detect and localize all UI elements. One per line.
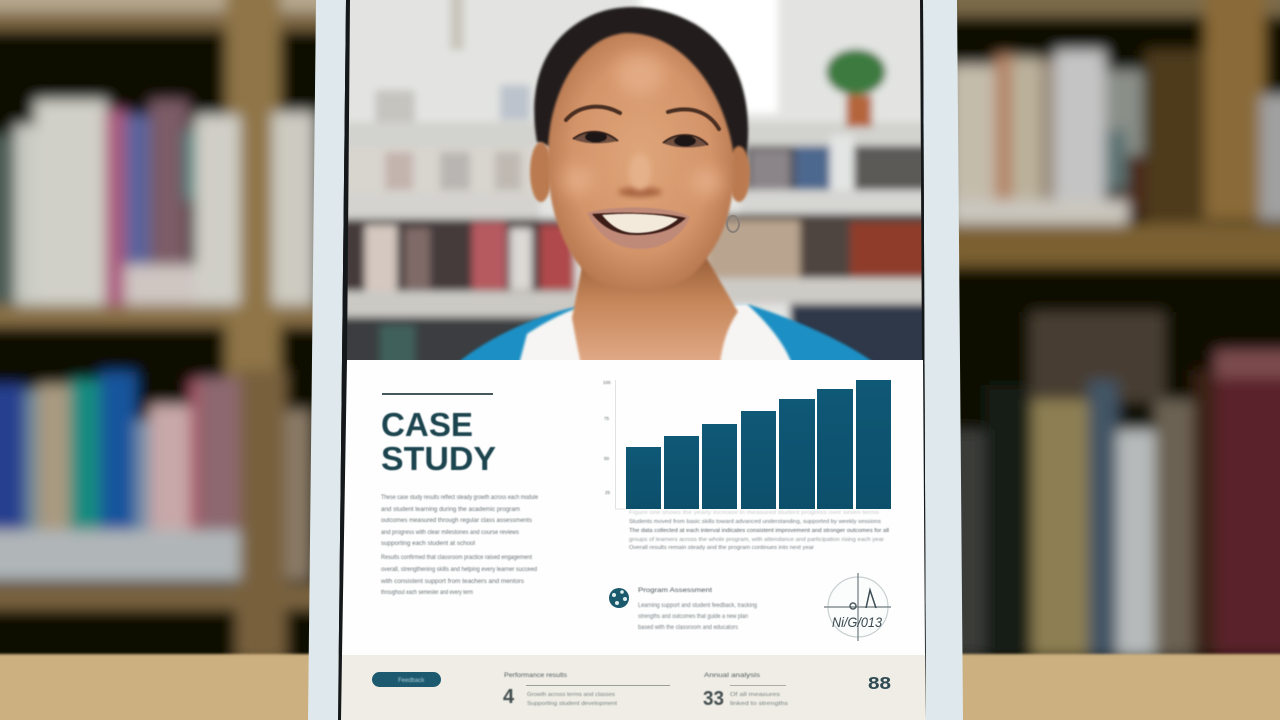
key finding text: Learning support and student feedback, tracking bbox=[638, 603, 757, 609]
blurred library behind student bbox=[347, 0, 922, 360]
ears bbox=[530, 142, 552, 202]
emblem: crosshair seal: Ni/G/013 bbox=[832, 614, 882, 630]
axis labels: 25 bbox=[605, 490, 611, 495]
chart caption bbox=[629, 510, 889, 551]
footer stat one: 4 bbox=[503, 686, 515, 708]
body text: Results confirmed that classroom practice raised engagement bbox=[381, 554, 532, 561]
footer stat one: Growth across terms and classes bbox=[527, 692, 615, 698]
bar chart bbox=[603, 380, 891, 509]
chart caption: Overall results remain steady and the program continues into next year bbox=[629, 545, 814, 551]
footer button bbox=[372, 672, 441, 687]
axis labels bbox=[603, 380, 611, 495]
body text: and progress with clear milestones and course reviews bbox=[381, 529, 520, 536]
chart caption: Figure one shows the yearly increase in measured student progress over seven terms bbox=[629, 510, 880, 516]
eyebrows bbox=[566, 107, 719, 129]
earring bbox=[727, 216, 739, 232]
right bookshelf bbox=[945, 0, 1280, 680]
key finding text: strengths and outcomes that guide a new plan bbox=[638, 614, 748, 620]
white shirt bbox=[519, 304, 792, 364]
icon: teal network badge bbox=[609, 588, 629, 608]
key finding text bbox=[638, 588, 757, 631]
chart caption: The data collected at each interval indicates consistent improvement and stronger outcomes for all bbox=[629, 528, 889, 534]
axis labels: 100 bbox=[603, 380, 611, 385]
footer column two rule bbox=[730, 685, 786, 686]
footer stat two: Of all measures bbox=[730, 692, 780, 698]
footer stat one: Supporting student development bbox=[527, 701, 618, 707]
teeth bbox=[602, 214, 678, 233]
plant bbox=[826, 49, 886, 95]
heading rule bbox=[382, 393, 493, 395]
page number: 88 bbox=[868, 673, 891, 693]
panel: report page bbox=[342, 360, 925, 655]
body text: overall, strengthening skills and helping every learner succeed bbox=[381, 566, 537, 573]
eyes bbox=[573, 132, 708, 147]
emblem: crosshair seal bbox=[824, 573, 891, 641]
hero photo: student smiling in library bbox=[347, 0, 922, 360]
body text bbox=[380, 494, 538, 596]
body text: with consistent support from teachers and mentors bbox=[380, 578, 525, 585]
key finding text: Program Assessment bbox=[638, 588, 712, 594]
axis labels: 75 bbox=[604, 416, 610, 421]
footer stat one bbox=[503, 686, 618, 708]
footer column two heading: Annual analysis bbox=[704, 673, 760, 679]
title: CASE bbox=[381, 406, 473, 443]
footer stat two: 33 bbox=[703, 688, 724, 710]
body text: supporting each student at school bbox=[381, 540, 476, 547]
footer stat two: linked to strengths bbox=[730, 701, 788, 707]
body text: These case study results reflect steady growth across each module bbox=[381, 494, 538, 501]
footer column one heading: Performance results bbox=[504, 673, 567, 679]
footer band bbox=[341, 655, 926, 720]
nose bbox=[618, 154, 662, 197]
chart axes bbox=[616, 380, 626, 509]
axis labels: 50 bbox=[604, 456, 610, 461]
chart caption: Students moved from basic skills toward advanced understanding, supported by weekly sessions bbox=[629, 519, 882, 525]
hair strand behind neck bbox=[704, 270, 716, 306]
footer stat two bbox=[703, 688, 788, 710]
body text: and student learning during the academic program bbox=[381, 506, 520, 513]
footer column one rule bbox=[526, 685, 670, 686]
key finding text: based with the classroom and educators bbox=[638, 625, 738, 631]
mouth bbox=[587, 207, 690, 249]
tablet screen edge bbox=[338, 0, 926, 720]
body text: throughout each semester and every term bbox=[381, 589, 473, 596]
blue cardigan bbox=[456, 305, 876, 364]
cheek highlights bbox=[562, 55, 722, 196]
title bbox=[381, 406, 496, 477]
bars bbox=[626, 380, 891, 509]
title: STUDY bbox=[381, 440, 496, 477]
footer button: Feedback bbox=[398, 678, 425, 684]
hair bbox=[534, 7, 748, 160]
tablet frame bbox=[308, 0, 963, 720]
neck bbox=[572, 250, 738, 364]
left bookshelf bbox=[0, 0, 340, 680]
wooden table bbox=[0, 654, 1280, 720]
face bbox=[548, 33, 734, 291]
chart caption: groups of learners across the whole program, with attendance and participation rising each year bbox=[629, 537, 884, 543]
body text: outcomes measured through regular class assessments bbox=[381, 517, 533, 524]
